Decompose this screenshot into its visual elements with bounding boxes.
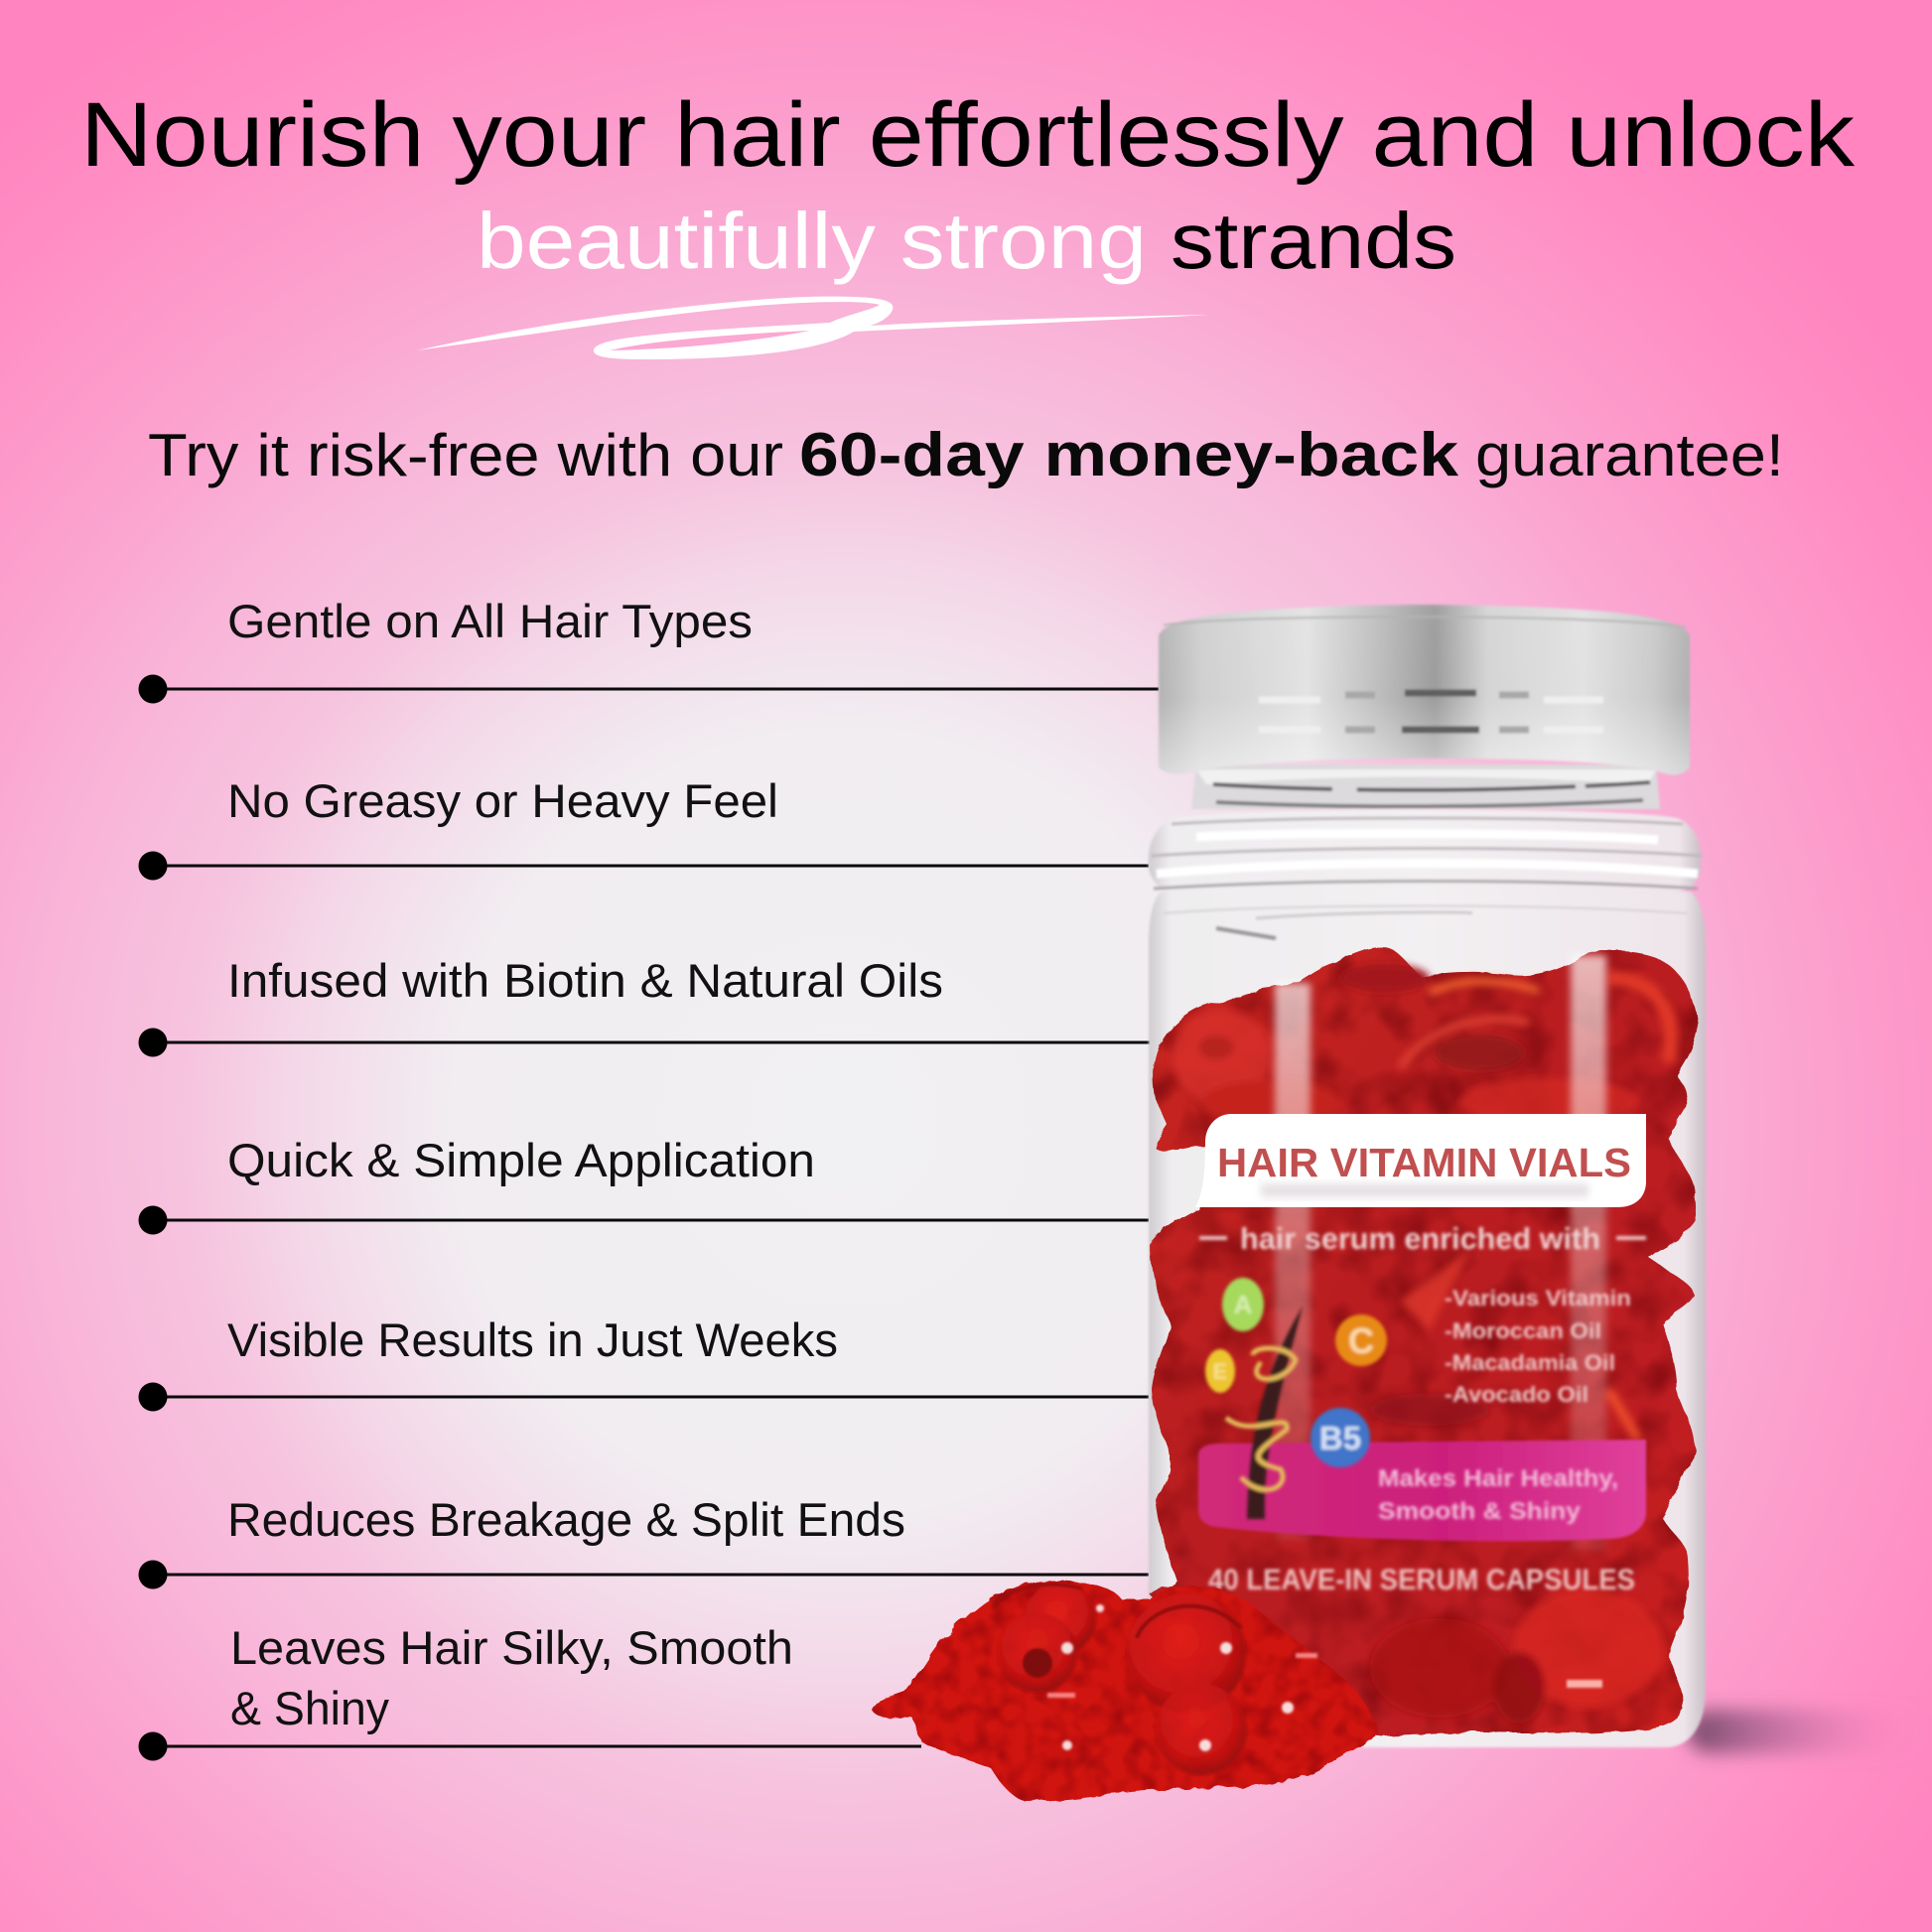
capsule highlights [1047, 1604, 1602, 1751]
benefit: biotin: Infused with Biotin & Natural Oils [227, 954, 943, 1007]
benefit: biotin [139, 954, 1150, 1056]
guarantee line: guarantee! [1475, 422, 1784, 488]
ingredient list: -Avocado Oil [1445, 1382, 1588, 1407]
ingredient list: -Moroccan Oil [1445, 1318, 1601, 1343]
label: serum line: hair serum enriched with [1240, 1221, 1600, 1256]
benefit: application [139, 1134, 1149, 1235]
pink claim band: Smooth & Shiny [1378, 1498, 1582, 1525]
jar neck [1191, 764, 1660, 809]
capsule beads [993, 1583, 1247, 1775]
benefit: no greasy: No Greasy or Heavy Feel [227, 774, 778, 827]
label: product name [1195, 1114, 1646, 1207]
jar body [1149, 892, 1706, 1747]
capsule pile [872, 1580, 1602, 1801]
ingredient list [1445, 1286, 1631, 1407]
benefit: gentle: Gentle on All Hair Types [227, 595, 753, 647]
capsules inside jar [1150, 948, 1698, 1736]
title: Nourish your hair effortlessly and unlock [80, 84, 1856, 186]
guarantee line: Try it risk-free with our [148, 422, 783, 488]
ingredient list: -Macadamia Oil [1445, 1350, 1615, 1375]
benefit: silky: Leaves Hair Silky, Smooth [230, 1621, 793, 1674]
guarantee line: 60-day money-back [799, 421, 1459, 489]
benefit: results [139, 1313, 1149, 1412]
vitamin A badge: A [1234, 1290, 1253, 1319]
jar lid [1159, 605, 1690, 775]
benefit: gentle [139, 595, 1159, 703]
title [80, 84, 1856, 285]
pink claim band: Makes Hair Healthy, [1378, 1465, 1618, 1492]
capsule shading [1172, 964, 1670, 1724]
ingredient list: -Various Vitamin [1445, 1286, 1631, 1311]
title: beautifully strong [477, 197, 1147, 285]
vitamin A badge [1222, 1278, 1264, 1331]
jar highlights [1164, 905, 1688, 938]
vitamin E badge [1205, 1349, 1235, 1393]
decorative scribble underline [417, 297, 1209, 359]
jar shoulder ring [1149, 809, 1702, 896]
benefit: breakage [139, 1493, 1149, 1588]
vitamin E badge: E [1213, 1359, 1227, 1384]
benefit: silky: & Shiny [230, 1682, 389, 1734]
guarantee line [148, 421, 1784, 489]
benefit: application: Quick & Simple Application [227, 1134, 815, 1186]
benefit: breakage: Reduces Breakage & Split Ends [227, 1493, 905, 1546]
vitamin B5 badge [1311, 1408, 1370, 1467]
icon: hair strand [1226, 1307, 1303, 1519]
product jar [1149, 764, 1706, 1747]
benefit: silky [139, 1621, 921, 1761]
vitamin C badge [1335, 1314, 1387, 1366]
jar shadow [1688, 1710, 1926, 1753]
benefit: no greasy [139, 774, 1149, 880]
capsule count text: 40 LEAVE-IN SERUM CAPSULES [1208, 1564, 1635, 1596]
glass light strips [1275, 955, 1606, 1551]
benefit: results: Visible Results in Just Weeks [227, 1313, 838, 1366]
vitamin B5 badge: B5 [1319, 1420, 1361, 1456]
title: strands [1171, 197, 1456, 285]
vitamin C badge: C [1348, 1320, 1374, 1361]
pink claim band [1198, 1440, 1646, 1541]
label: product name: HAIR VITAMIN VIALS [1217, 1140, 1631, 1185]
lid grip lines [1259, 693, 1603, 730]
